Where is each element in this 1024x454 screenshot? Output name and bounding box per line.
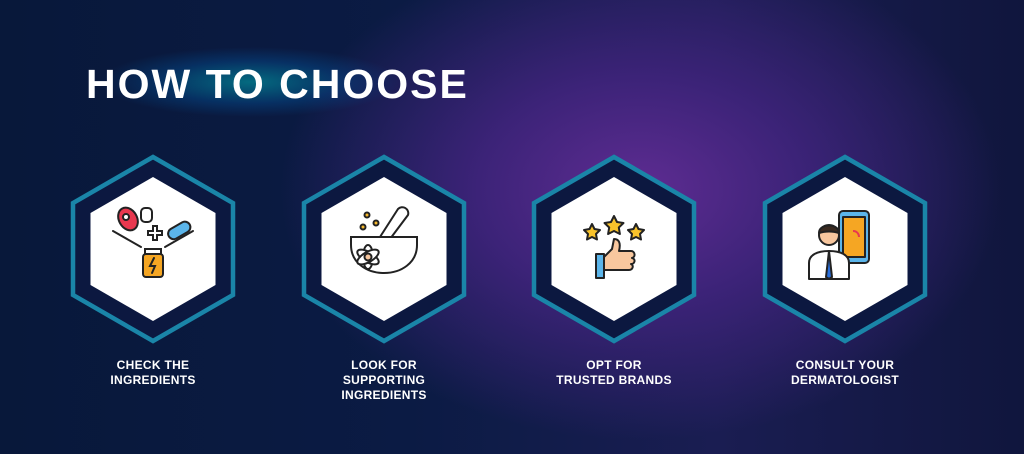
text: trusted brands: TRUSTED BRANDS [556,373,672,387]
title: HOW TO CHOOSE [86,61,469,107]
text: supporting ingredients: SUPPORTING [343,373,425,387]
icon: mortar [351,207,417,273]
panel: dermatologist [765,157,925,341]
text: dermatologist: CONSULT YOUR [796,358,894,372]
icon: thumbs up with stars [584,216,644,278]
text: supporting ingredients: INGREDIENTS [341,388,427,402]
text: trusted brands: OPT FOR [586,358,642,372]
icon: ingredients [113,204,193,277]
text: check ingredients [110,358,196,387]
text: check ingredients: CHECK THE [117,358,189,372]
icon: doctor with phone [809,211,869,279]
panel: supporting ingredients [304,157,464,341]
text: supporting ingredients: LOOK FOR [351,358,417,372]
panel: trusted brands [534,157,694,341]
text: check ingredients: INGREDIENTS [110,373,196,387]
text: dermatologist: DERMATOLOGIST [791,373,899,387]
text: trusted brands [556,358,672,387]
text: supporting ingredients [341,358,427,402]
text: dermatologist [791,358,899,387]
panel: check ingredients [73,157,233,341]
